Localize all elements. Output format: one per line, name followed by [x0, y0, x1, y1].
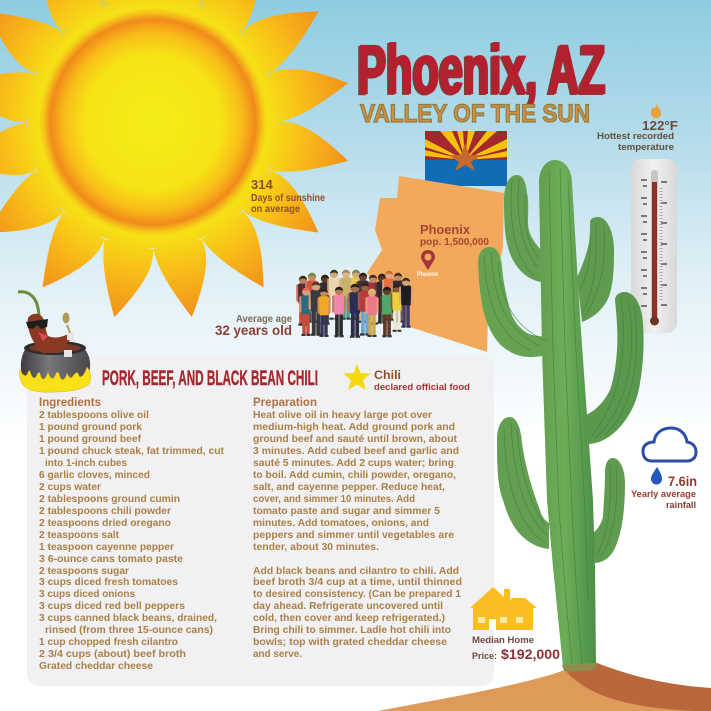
- median home price: $192,000: [501, 646, 560, 662]
- preparation text: day ahead. Refrigerate uncovered until: [253, 600, 443, 612]
- preparation text: Bring chili to simmer. Ladle hot chili into: [253, 624, 451, 636]
- official food label: [374, 368, 470, 393]
- ingredients list: 2 teaspoons salt: [39, 529, 119, 541]
- ingredients list: 1 teaspoon cayenne pepper: [39, 541, 174, 553]
- median home price: Price:: [472, 651, 497, 662]
- median home price: Median Home: [472, 635, 534, 646]
- preparation text: Preparation: [253, 397, 317, 409]
- cactus arm: left big: [478, 247, 555, 357]
- preparation text: medium-high heat. Add ground pork and: [253, 421, 455, 433]
- ingredients list: Grated cheddar cheese: [39, 660, 153, 672]
- desert hill: [378, 663, 711, 711]
- fire: [20, 367, 91, 392]
- cactus arm: upper right: [577, 217, 614, 322]
- cactus ribs: [484, 168, 637, 664]
- icon: map pin: Phoenix: [417, 272, 439, 278]
- ingredients list: Ingredients: [39, 397, 101, 409]
- hottest temperature stat: temperature: [618, 142, 674, 153]
- saguaro cactus: [478, 160, 644, 672]
- icon: water drop: [651, 467, 662, 484]
- stat: days of sunshine: 314: [251, 177, 273, 192]
- preparation text: bowls; top with grated cheddar cheese: [253, 636, 447, 648]
- preparation text: cover, and simmer 10 minutes. Add: [253, 493, 415, 505]
- ingredients list: 2 tablespoons ground cumin: [39, 493, 180, 505]
- average age label: 32 years old: [215, 322, 292, 338]
- ingredients list: 1 pound ground beef: [39, 433, 141, 445]
- icon: map pin: [417, 250, 439, 278]
- hottest temperature stat: 122°F: [642, 118, 678, 133]
- ingredients list: into 1-inch cubes: [45, 457, 127, 469]
- chili hands: [64, 333, 74, 357]
- people group: [296, 270, 413, 338]
- hottest temperature stat: [597, 103, 678, 153]
- median home price: [472, 635, 560, 662]
- official food label: declared official food: [374, 382, 470, 393]
- ingredients list: 1 pound chuck steak, fat trimmed, cut: [39, 445, 224, 457]
- ingredients list: 2 cups water: [39, 481, 101, 493]
- preparation text: to boil. Add cumin, chili powder, oregano,: [253, 469, 456, 481]
- subtitle: VALLEY OF THE SUN: [360, 100, 590, 128]
- ingredients list: 2 3/4 cups (about) beef broth: [39, 648, 186, 660]
- preparation text: salt, and cayenne pepper. Reduce heat,: [253, 481, 445, 493]
- official food label: Chili: [374, 368, 401, 382]
- rainfall stat: [631, 473, 697, 511]
- average age label: [215, 314, 292, 338]
- average age label: Average age: [236, 314, 292, 325]
- preparation text: peppers and simmer until vegetables are: [253, 529, 454, 541]
- preparation text: to desired consistency. (Can be prepared 1: [253, 588, 461, 600]
- icon: house: [470, 587, 537, 630]
- ingredients list: 6 garlic cloves, minced: [39, 469, 150, 481]
- cactus arm: lower left: [497, 417, 549, 549]
- preparation text: [253, 397, 462, 660]
- recipe heading: PORK, BEEF, AND BLACK BEAN CHILI: [102, 367, 318, 390]
- ingredients list: rinsed (from three 15-ounce cans): [45, 624, 213, 636]
- thermometer: [631, 159, 677, 333]
- ingredients list: 3 6-ounce cans tomato paste: [39, 553, 183, 565]
- wooden spoon: [67, 325, 72, 338]
- preparation text: and serve.: [253, 648, 302, 660]
- preparation text: tender, about 30 minutes.: [253, 541, 379, 553]
- preparation text: tomato paste and sugar and simmer 5: [253, 505, 440, 517]
- chili body: [28, 314, 71, 353]
- icon: chili chef in pot: [18, 292, 91, 392]
- arizona flag: [425, 131, 507, 186]
- preparation text: Add black beans and cilantro to chili. Add: [253, 565, 459, 577]
- ingredients list: 3 cups diced onions: [39, 588, 135, 600]
- icon: flame: [651, 103, 661, 118]
- chili mouth: [38, 332, 48, 341]
- ingredients list: 1 pound ground pork: [39, 421, 142, 433]
- recipe panel: [27, 355, 494, 686]
- ingredients list: 2 teaspoons dried oregano: [39, 517, 171, 529]
- rainfall stat: rainfall: [666, 500, 696, 511]
- cooking pot: [21, 348, 90, 389]
- cactus trunk: [539, 160, 596, 667]
- ingredients list: 1 cup chopped fresh cilantro: [39, 636, 178, 648]
- cactus arm: upper left: [504, 175, 541, 282]
- preparation text: Heat olive oil in heavy large pot over: [253, 409, 432, 421]
- cactus arm: lower right: [593, 458, 625, 563]
- preparation text: sauté 5 minutes. Add 2 cups water; bring: [253, 457, 454, 469]
- preparation text: ground beef and sauté until brown, about: [253, 433, 457, 445]
- cactus base shadow: [562, 663, 596, 672]
- ingredients list: 3 cups diced red bell peppers: [39, 600, 185, 612]
- cactus arm: right big: [586, 292, 644, 444]
- map of arizona: [367, 176, 504, 352]
- preparation text: 3 minutes. Add cubed beef and garlic and: [253, 445, 459, 457]
- hottest temperature stat: Hottest recorded: [597, 131, 674, 142]
- preparation text: beef broth 3/4 cup at a time, until thinned: [253, 576, 462, 588]
- stat: days of sunshine: [251, 177, 325, 215]
- icon: rain cloud: [643, 428, 696, 484]
- phoenix population label: [420, 222, 489, 248]
- ingredients list: [39, 397, 224, 672]
- icon: star: [343, 364, 371, 390]
- preparation text: cold, then cover and keep refrigerated.): [253, 612, 445, 624]
- chili stem: [18, 292, 39, 316]
- rainfall stat: Yearly average: [631, 489, 696, 500]
- rainfall stat: 7.6in: [668, 473, 697, 489]
- phoenix population label: Phoenix: [420, 222, 471, 237]
- ingredients list: 2 tablespoons chili powder: [39, 505, 171, 517]
- ingredients list: 2 tablespoons olive oil: [39, 409, 149, 421]
- stat: days of sunshine: Days of sunshine: [251, 193, 325, 204]
- ingredients list: 2 teaspoons sugar: [39, 565, 129, 577]
- preparation text: minutes. Add tomatoes, onions, and: [253, 517, 429, 529]
- sun: [0, 0, 353, 322]
- stat: days of sunshine: on average: [251, 204, 300, 215]
- ingredients list: 3 cups canned black beans, drained,: [39, 612, 217, 624]
- ingredients list: 3 cups diced fresh tomatoes: [39, 576, 178, 588]
- sunglasses: [26, 319, 48, 329]
- phoenix population label: pop. 1,500,000: [420, 237, 489, 248]
